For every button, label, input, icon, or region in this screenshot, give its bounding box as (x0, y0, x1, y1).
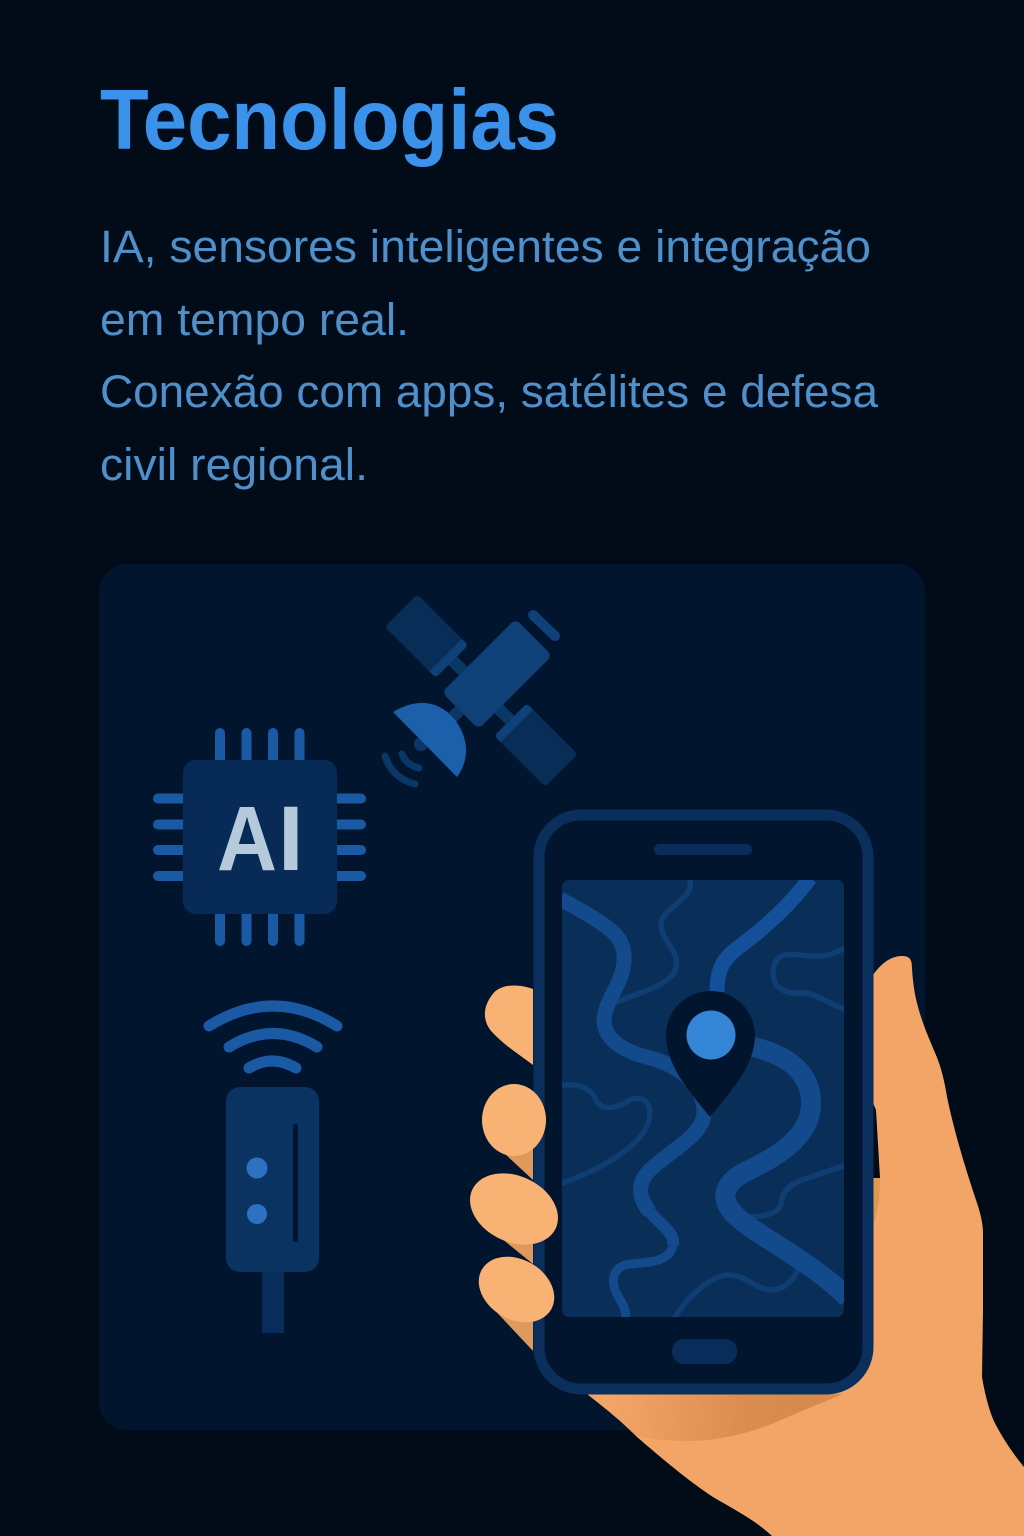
chip body (183, 760, 337, 914)
phone speaker (654, 844, 752, 855)
phone home button (672, 1339, 737, 1364)
sensor stem (262, 1270, 284, 1333)
phone frame (539, 815, 868, 1389)
chip label: A (217, 788, 277, 890)
icon: AI chip (158, 733, 361, 941)
description text: IA, sensores inteligentes e integração (100, 221, 871, 272)
icon: satellite (385, 594, 578, 787)
map screen (562, 880, 844, 1317)
hand: fingers (458, 985, 570, 1351)
wifi arcs (209, 1006, 337, 1068)
hand: palm and thumb (587, 956, 1024, 1536)
satellite dish (393, 703, 466, 777)
pin centre (686, 1010, 736, 1060)
sensor slot (293, 1124, 298, 1242)
satellite body (442, 619, 552, 729)
map pin (666, 991, 755, 1117)
description text (100, 221, 879, 490)
finger 1 (485, 985, 533, 1065)
finger 4 (467, 1244, 566, 1335)
satellite right solar panel (494, 703, 578, 787)
gap beside phone (873, 1103, 880, 1178)
signal waves (385, 754, 419, 784)
finger 3 (458, 1160, 570, 1258)
dish feed (414, 737, 428, 751)
panel: illustration (99, 564, 925, 1430)
thin map streams (560, 880, 846, 1319)
finger 2 (482, 1084, 546, 1156)
description text: Conexão com apps, satélites e defesa (100, 366, 879, 417)
satellite left solar panel (385, 594, 468, 678)
sensor body (226, 1087, 319, 1272)
description text: civil regional. (100, 439, 368, 490)
shadow beside phone (873, 1178, 880, 1226)
chip label: I (278, 788, 304, 890)
main rivers (560, 878, 848, 1319)
palm shadow under phone (587, 1394, 843, 1441)
satellite antenna bar (533, 615, 555, 636)
finger shadows (485, 1140, 533, 1351)
icon: wireless sensor (209, 1006, 337, 1333)
description text: em tempo real. (100, 294, 409, 345)
title: Tecnologias (100, 73, 559, 168)
sensor lights (246, 1158, 268, 1224)
phone (539, 815, 868, 1389)
